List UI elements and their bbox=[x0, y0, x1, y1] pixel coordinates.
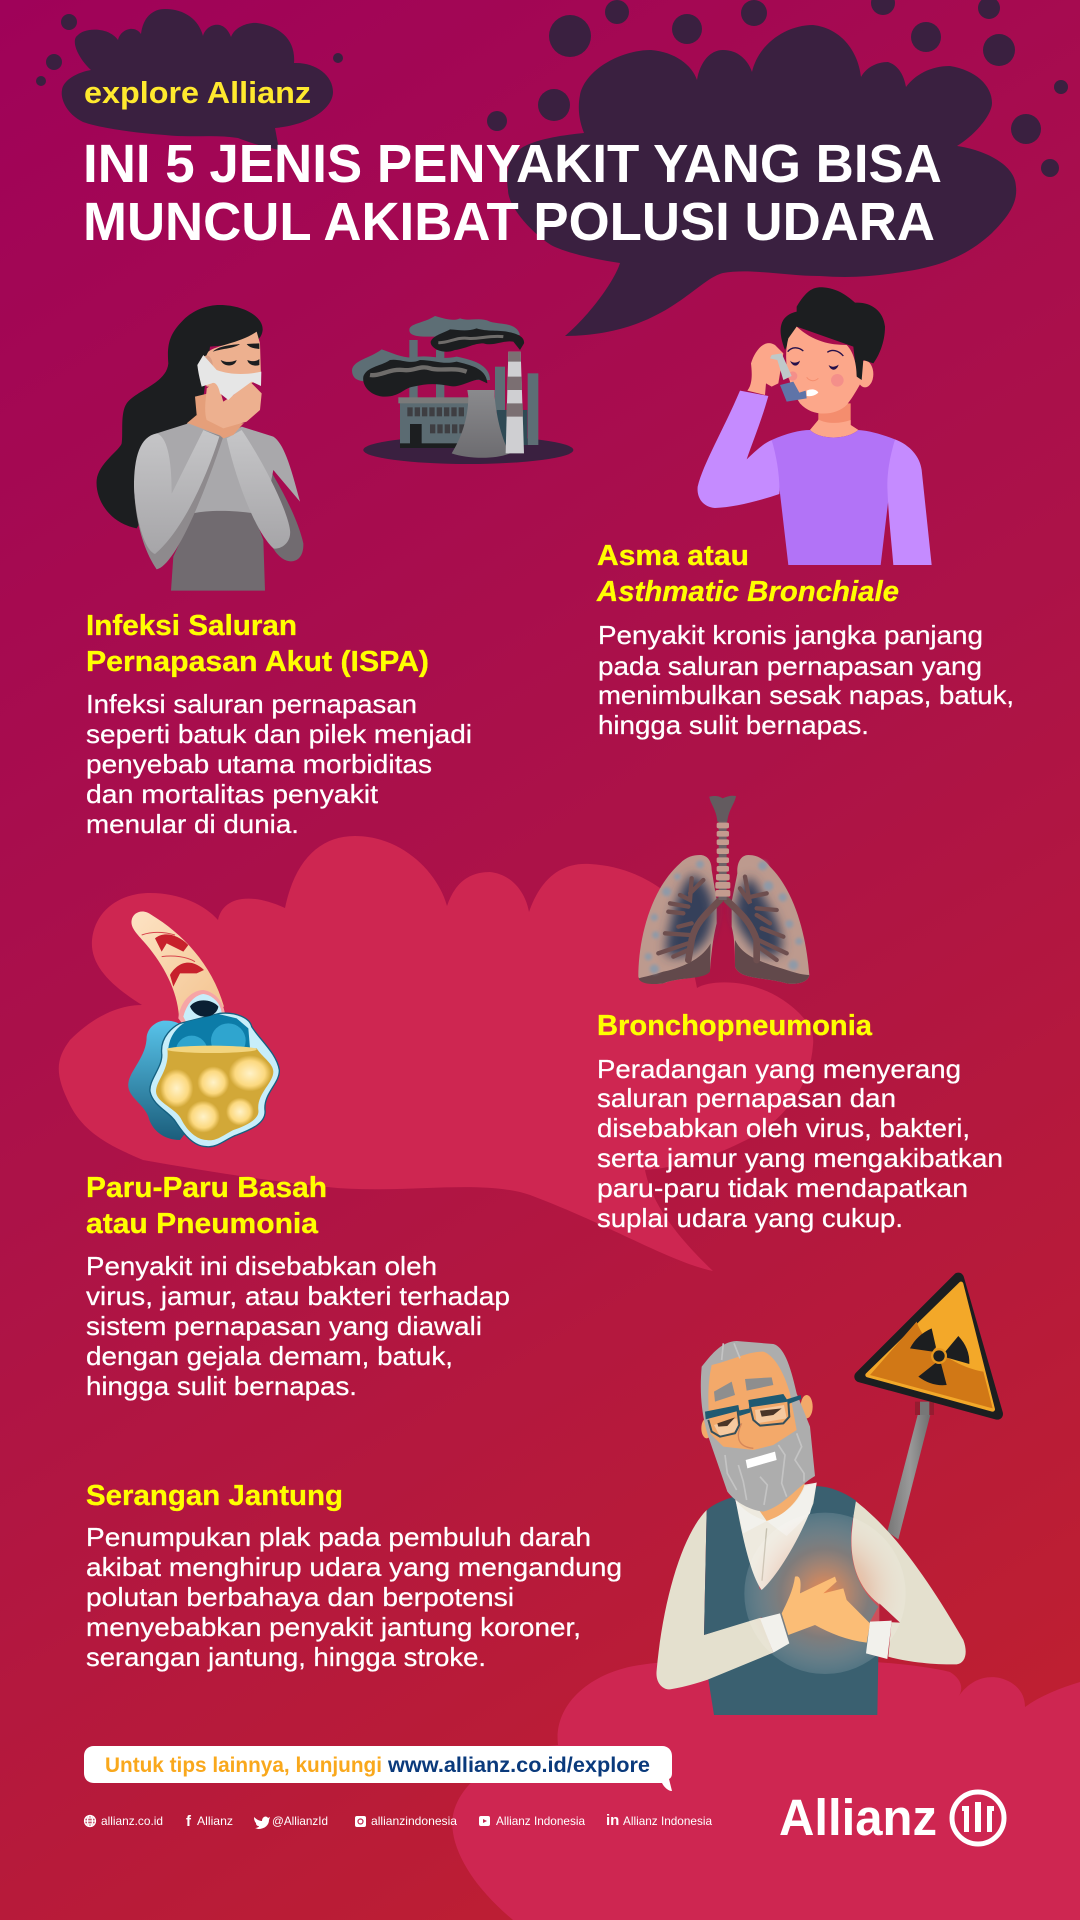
heading: Pneumonia: atau Pneumonia bbox=[86, 1208, 319, 1240]
illustration: radiation warning sign bbox=[860, 1278, 997, 1539]
illustration: damaged lungs bbox=[638, 796, 809, 984]
body text: Pneumonia: dengan gejala demam, batuk, bbox=[86, 1341, 453, 1371]
social links row bbox=[84, 1812, 712, 1830]
body text: Bronchopneumonia: saluran pernapasan dan bbox=[597, 1083, 896, 1113]
title: MUNCUL AKIBAT POLUSI UDARA bbox=[83, 192, 935, 252]
background blob: bottom right pale cloud bbox=[452, 1658, 1080, 1920]
body text: Serangan Jantung: polutan berbahaya dan berpotensi bbox=[86, 1582, 514, 1612]
title: INI 5 JENIS PENYAKIT YANG BISA bbox=[83, 134, 942, 194]
body text: Serangan Jantung: Penumpukan plak pada pembuluh darah bbox=[86, 1522, 591, 1552]
body text: ISPA: penyebab utama morbiditas bbox=[86, 749, 432, 779]
illustration: fluid-filled alveoli bbox=[128, 911, 279, 1147]
icon: youtube bbox=[479, 1816, 490, 1826]
body text: Pneumonia: virus, jamur, atau bakteri terhadap bbox=[86, 1281, 510, 1311]
small speech cloud bbox=[36, 9, 343, 150]
body text: Pneumonia: sistem pernapasan yang diawali bbox=[86, 1311, 482, 1341]
body text: Asma: pada saluran pernapasan yang bbox=[598, 651, 982, 681]
body text: Bronchopneumonia: disebabkan oleh virus, bakteri, bbox=[597, 1113, 970, 1143]
body text: Serangan Jantung: menyebabkan penyakit jantung koroner, bbox=[86, 1612, 581, 1642]
callout: website pill bbox=[84, 1746, 672, 1791]
icon: globe bbox=[84, 1816, 96, 1826]
body text: ISPA: Infeksi saluran pernapasan bbox=[86, 689, 417, 719]
social links row: Allianz Indonesia bbox=[496, 1814, 585, 1828]
illustration: polluting factory bbox=[352, 316, 573, 464]
body text: Pneumonia: Penyakit ini disebabkan oleh bbox=[86, 1251, 437, 1281]
illustration: person using inhaler bbox=[698, 287, 932, 565]
body text: Bronchopneumonia: serta jamur yang mengakibatkan bbox=[597, 1143, 1003, 1173]
background blob: middle pale cloud bbox=[59, 836, 813, 1271]
body text: Bronchopneumonia: Peradangan yang menyerang bbox=[597, 1054, 961, 1084]
body text: Pneumonia: hingga sulit bernapas. bbox=[86, 1371, 357, 1401]
heading: Pneumonia bbox=[86, 1172, 327, 1240]
body text: Asma: Penyakit kronis jangka panjang bbox=[598, 620, 983, 650]
social links row: @AllianzId bbox=[272, 1814, 328, 1828]
body text: ISPA: seperti batuk dan pilek menjadi bbox=[86, 719, 472, 749]
icon: twitter bbox=[254, 1817, 270, 1829]
illustration: older man clutching chest bbox=[656, 1341, 966, 1715]
social links row: allianzindonesia bbox=[371, 1814, 457, 1828]
body text: Bronchopneumonia: suplai udara yang cukup. bbox=[597, 1203, 903, 1233]
body text: Bronchopneumonia bbox=[597, 1054, 1003, 1233]
social links row: Allianz bbox=[197, 1814, 233, 1828]
heading: ISPA: Infeksi Saluran bbox=[86, 610, 297, 642]
heading: Asma bbox=[596, 540, 899, 608]
illustration: woman with mask coughing bbox=[97, 305, 303, 591]
heading: Asma: Asma atau bbox=[597, 540, 749, 572]
body text: Serangan Jantung bbox=[86, 1522, 622, 1672]
heading: Pneumonia: Paru-Paru Basah bbox=[86, 1172, 327, 1204]
body text: Serangan Jantung: akibat menghirup udara yang mengandung bbox=[86, 1552, 622, 1582]
heading: Bronchopneumonia: Bronchopneumonia bbox=[597, 1010, 873, 1042]
callout: website pill: www.allianz.co.id/explore bbox=[387, 1754, 650, 1777]
logo: Allianz: Allianz bbox=[779, 1789, 937, 1846]
brand label: explore Allianz bbox=[84, 75, 311, 110]
social links row: in bbox=[606, 1812, 619, 1829]
body text: ISPA: dan mortalitas penyakit bbox=[86, 779, 379, 809]
body text: Bronchopneumonia: paru-paru tidak mendapatkan bbox=[597, 1173, 968, 1203]
title bbox=[83, 134, 942, 252]
body text: ISPA: menular di dunia. bbox=[86, 809, 299, 839]
body text: Asma bbox=[598, 620, 1014, 740]
body text: Asma: menimbulkan sesak napas, batuk, bbox=[598, 680, 1014, 710]
body text: ISPA bbox=[86, 689, 472, 839]
body text: Pneumonia bbox=[86, 1251, 510, 1401]
heading: Serangan Jantung: Serangan Jantung bbox=[86, 1480, 343, 1512]
icon: instagram bbox=[355, 1816, 366, 1827]
body text: Asma: hingga sulit bernapas. bbox=[598, 710, 869, 740]
social links row: Allianz Indonesia bbox=[623, 1814, 712, 1828]
heading: ISPA bbox=[86, 610, 429, 678]
social links row: allianz.co.id bbox=[101, 1814, 163, 1828]
callout: website pill: Untuk tips lainnya, kunjungi bbox=[105, 1754, 382, 1777]
large speech cloud with smoke dots bbox=[487, 0, 1068, 336]
heading: Asma: Asthmatic Bronchiale bbox=[596, 576, 899, 608]
body text: Serangan Jantung: serangan jantung, hingga stroke. bbox=[86, 1642, 486, 1672]
heading: ISPA: Pernapasan Akut (ISPA) bbox=[86, 646, 429, 678]
social links row: f bbox=[186, 1813, 192, 1830]
